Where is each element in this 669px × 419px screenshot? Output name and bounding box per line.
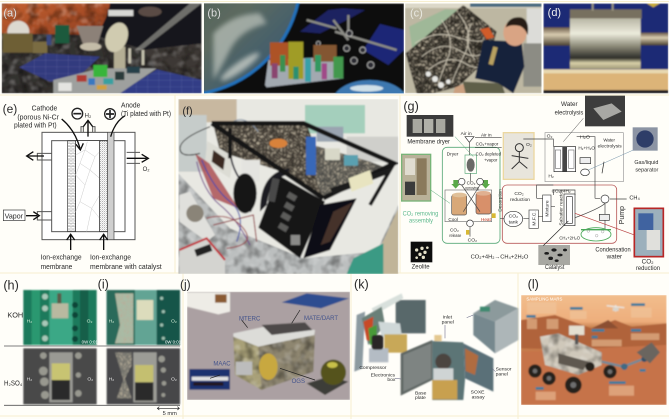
diagram labels: Catalyst — [545, 265, 565, 271]
red reduction loop — [502, 185, 617, 243]
photo labels: O₂ — [87, 377, 93, 383]
component labels: Sensor — [496, 366, 512, 372]
component labels: Electronics — [371, 373, 396, 379]
diagram labels: Air in — [461, 131, 472, 137]
back cover — [396, 300, 426, 333]
panel g: CO2 removal and reduction flow diagram — [402, 96, 663, 272]
component labels — [359, 314, 512, 401]
rover body — [540, 333, 602, 375]
porous cathode — [76, 141, 100, 232]
electrolysis photo — [585, 96, 625, 126]
mars backdrop — [2, 3, 110, 37]
label k: (k) — [354, 277, 369, 291]
MAAC inset — [189, 369, 230, 390]
assembly caption: CO₂ removing — [403, 211, 439, 218]
catalyst photo — [538, 245, 570, 265]
label l: (l) — [528, 277, 539, 291]
photo i KOH — [107, 290, 180, 345]
callout leader lines — [431, 118, 634, 246]
text labels: membrane — [41, 264, 72, 271]
CO2 tank: CO₂ — [509, 214, 518, 220]
CO2 tank — [504, 211, 523, 227]
panel d: metal cylinder on ruler — [543, 3, 668, 93]
text labels: membrane with catalyst — [90, 264, 162, 271]
condensation tank — [581, 228, 611, 241]
panel j: hardware payload photo — [180, 277, 350, 400]
text labels: (porous Ni-Cr — [17, 114, 60, 121]
diagram labels: release — [449, 233, 462, 238]
diagram labels: H₂ — [548, 174, 554, 180]
MFC box: M.F.C. — [531, 211, 537, 226]
diagram labels: CO₂ — [467, 180, 476, 185]
CO2 reduction photo — [634, 208, 663, 257]
diagram labels: CH₄+2H₂O — [559, 236, 580, 242]
gray human box — [503, 133, 534, 179]
scale bar — [157, 407, 179, 417]
component labels: MAAC — [213, 362, 231, 368]
silver base — [178, 173, 398, 274]
black frame — [212, 123, 394, 198]
diagram labels: CO₂+4H₂→CH₄+2H₂O — [471, 254, 529, 260]
process lines — [462, 137, 627, 237]
label a: (a) — [3, 8, 17, 20]
text labels: Cathode — [32, 106, 57, 113]
diagram labels: Gas/liquid — [634, 160, 658, 166]
panel k: exploded instrument drawing — [354, 277, 518, 401]
white inset photo — [187, 292, 230, 314]
component labels: plate — [415, 395, 426, 401]
component labels: SOXE — [471, 389, 485, 395]
text labels: Anode — [121, 103, 140, 110]
water electrolysis box — [545, 133, 623, 182]
photo labels: 0W 0:01 — [165, 340, 182, 345]
diagram labels: Water — [561, 101, 578, 108]
diagram labels: O₂ — [547, 134, 553, 140]
membrane dryer photo — [407, 115, 453, 137]
minus sign — [72, 108, 83, 119]
label j: (j) — [180, 277, 191, 291]
wooden ruler — [543, 70, 668, 90]
text labels: plated with Pt) — [14, 123, 57, 130]
zeolite photo — [411, 242, 432, 262]
diagram labels: Cool — [448, 217, 458, 222]
component labels — [213, 316, 338, 385]
label KOH: KOH — [7, 311, 23, 320]
photo labels: H₂ — [109, 377, 114, 383]
component labels: Compressor — [359, 365, 387, 371]
sabatier reactor: Sabatier reactor — [559, 190, 565, 226]
membrane layer — [68, 141, 76, 232]
label H2SO4: H₂SO₄ — [4, 381, 22, 388]
landing pod — [77, 26, 103, 45]
circuit board model — [265, 57, 343, 87]
panel e: electrolysis cell schematic — [3, 102, 171, 271]
helicopter — [607, 305, 624, 312]
photo labels: O₂ — [87, 318, 93, 324]
diagram labels: CO₂ depleted — [476, 152, 501, 158]
stick figure — [512, 144, 528, 169]
photo h KOH — [23, 290, 97, 345]
label g: (g) — [403, 99, 419, 113]
diagram labels: O₂ — [526, 142, 532, 148]
assembly caption — [403, 211, 439, 225]
wiring — [180, 120, 258, 248]
photo labels: O₂ — [171, 377, 177, 383]
leader lines — [395, 315, 496, 379]
text labels: H₂ — [85, 114, 92, 120]
component labels: MATE/DART — [304, 316, 338, 322]
scale bar: 5 mm — [163, 411, 177, 417]
photo labels: H₂ — [109, 318, 114, 324]
separator circles — [580, 158, 609, 220]
dryer vessel — [465, 155, 477, 173]
diagram labels — [407, 101, 660, 272]
robotic arm — [602, 358, 645, 367]
photo labels: 0W 0:01 — [82, 340, 98, 345]
side electronics — [205, 141, 233, 178]
diagram labels: water — [606, 254, 622, 261]
habitat dome — [6, 19, 30, 34]
electronics box — [401, 340, 432, 396]
diagram labels: Dryer — [447, 152, 459, 158]
photo i acid — [107, 348, 180, 404]
diagram labels: CO₂ — [642, 258, 654, 265]
panel l: Mars rover poster — [521, 277, 667, 405]
diagram labels: Zeolite — [412, 264, 430, 270]
diagram labels: +vapor — [484, 158, 498, 164]
bubbles — [316, 30, 374, 76]
wire bundle — [406, 5, 497, 93]
component labels: panel — [496, 371, 508, 377]
OGS dome — [307, 377, 348, 395]
cell housing — [42, 132, 135, 240]
photo h acid — [23, 348, 97, 404]
anode plate — [108, 132, 114, 240]
CO2 tank: tank — [509, 220, 519, 226]
label i: (i) — [98, 277, 109, 291]
diagram labels: CO₂+vapor — [476, 142, 499, 148]
diagram labels: Desorption — [497, 189, 502, 212]
green dryer loop — [442, 147, 500, 243]
satellite dish — [114, 47, 125, 70]
electrolysis stack — [554, 147, 576, 172]
text labels — [14, 103, 171, 271]
diagram labels: Air in — [481, 133, 492, 139]
sabatier reactor — [559, 190, 575, 226]
text labels: O₂ — [143, 167, 150, 173]
text callouts — [526, 303, 646, 390]
text labels: (Ti plated with Pt) — [121, 111, 171, 118]
earth limb — [63, 0, 301, 95]
green wall board — [305, 105, 365, 133]
diagram labels: CO₂+4H₂ — [552, 188, 571, 194]
ports and arrows — [37, 127, 140, 220]
station truss — [307, 15, 397, 50]
base plate assembly — [432, 341, 465, 400]
vapor box — [3, 210, 25, 221]
mixture box: Mixture — [545, 200, 551, 217]
diagram labels: Condensation — [595, 247, 631, 254]
component labels: panel — [442, 319, 454, 325]
diagram labels: CO₂ — [468, 238, 477, 244]
text labels: Ion-exchange — [41, 255, 82, 262]
poster heading: SAMPLING MARS — [526, 296, 563, 301]
photo labels: H₂ — [27, 318, 32, 324]
small earth — [333, 80, 407, 123]
blue array — [282, 293, 349, 308]
diagram labels: separator — [635, 167, 658, 173]
photo labels — [27, 318, 182, 383]
assembly caption: assembly — [409, 218, 434, 225]
panels h and i: electrolysis bubble photos — [3, 277, 182, 417]
adsorption columns — [445, 190, 492, 222]
black front panel — [258, 175, 325, 258]
component labels: Base — [415, 390, 427, 396]
top box — [473, 300, 518, 322]
diagram labels: removing — [465, 185, 479, 190]
solar panels — [19, 53, 100, 82]
label h: (h) — [3, 279, 19, 293]
green and yellow flow arrows — [451, 180, 496, 235]
circuit board — [53, 68, 157, 93]
component labels: assay — [472, 394, 485, 400]
rover wheels — [528, 362, 617, 393]
diagram labels: H₂+H₂O — [578, 145, 595, 151]
separator photo — [633, 127, 658, 151]
catalyst membrane — [100, 141, 108, 232]
compressor frame — [354, 312, 365, 372]
diagram labels: Pump — [619, 206, 626, 224]
callout lines — [210, 310, 315, 380]
diagram labels: H₂O — [580, 134, 590, 140]
plus sign — [105, 109, 115, 119]
panel a: lunar base illustration — [2, 3, 202, 93]
diagram labels: CO₂ — [450, 228, 459, 233]
diagram labels: Heat — [481, 217, 492, 222]
black electronics box — [303, 198, 357, 258]
instrument box — [258, 333, 315, 390]
cylinder body — [570, 18, 641, 69]
diagram labels: reduction — [636, 265, 660, 272]
component labels: OGS — [292, 379, 305, 385]
mixture box — [543, 195, 551, 222]
text labels: Ion-exchange — [90, 255, 131, 262]
MFC box — [529, 210, 538, 228]
diagram labels: Water — [603, 138, 615, 144]
label f: (f) — [182, 105, 193, 117]
sensor panel — [463, 343, 493, 392]
diagram labels: CO₂ — [514, 191, 524, 197]
diagram labels: electrolysis — [555, 109, 583, 116]
diagram labels: reduction — [510, 197, 530, 203]
panel f: hardware assembly photo — [178, 99, 398, 274]
diagram labels: electrolysis — [598, 144, 622, 150]
panel c: astronaut with hardware rack — [405, 3, 542, 93]
valves — [458, 137, 483, 227]
vapor box: Vapor — [5, 213, 24, 220]
component labels: Inlet — [443, 314, 453, 320]
diagram labels: CH₄ — [629, 196, 641, 202]
panel b: orbital station illustration — [204, 3, 404, 94]
astronaut — [462, 82, 505, 93]
CO2 assembly photo — [402, 154, 431, 201]
diagram labels: Membrane dryer — [407, 138, 450, 145]
component labels: MTERC — [239, 317, 261, 323]
martian hills — [521, 315, 667, 352]
label e: (e) — [3, 102, 17, 116]
label b: (b) — [207, 8, 221, 20]
component labels: box — [387, 377, 396, 383]
photo labels: O₂ — [171, 318, 177, 324]
photo labels: H₂ — [27, 377, 32, 383]
label c: (c) — [410, 8, 423, 20]
label d: (d) — [548, 7, 561, 19]
equipment interior — [213, 124, 327, 198]
solar arrays — [300, 8, 365, 33]
